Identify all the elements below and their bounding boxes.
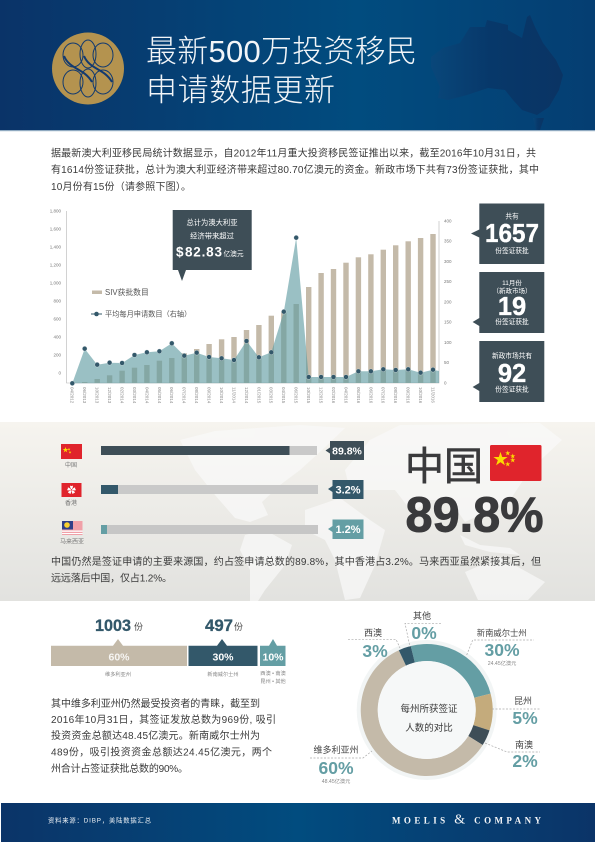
segment: NSW: 新南威尔士州 [207, 670, 239, 678]
callout: total funds: 亿澳元 [224, 249, 244, 258]
header banner [0, 0, 595, 131]
row: Malaysia: 1.2% [335, 524, 361, 536]
left axis: 1,400 [50, 244, 61, 250]
row: China [61, 441, 364, 469]
label: WA: 西澳 [364, 627, 382, 638]
x axis labels: 12/2014 [244, 387, 249, 404]
figure: Victoria count: 1003 [95, 616, 131, 635]
callout: total funds: 82.83 [185, 244, 222, 260]
legend: SIV获批数目 [105, 287, 149, 297]
bars [82, 234, 436, 383]
callout: total funds: $ [176, 244, 184, 260]
text: state commentary: 投资资金总额达48.45亿澳元。新南威尔士州为 [51, 729, 260, 742]
title: 最新500万投资移民 [146, 34, 417, 69]
label: others [405, 610, 441, 647]
logo [52, 32, 124, 104]
flag: China large: ★ [505, 451, 511, 457]
flag: China large: ★ [510, 454, 516, 460]
text: state commentary: 州合计占签证获批总数的90%。 [51, 762, 188, 775]
segment: Victoria: 维多利亚州 [105, 670, 131, 678]
text: country commentary: 远远落后中国，仅占1.2%。 [51, 572, 172, 584]
x axis labels: 10/2013 [95, 387, 100, 404]
text: country commentary [51, 555, 541, 584]
source note: 资料来源：DIBP，美陆数据汇总 [48, 816, 152, 824]
left axis: 800 [53, 298, 61, 304]
left axis: 600 [53, 316, 61, 322]
label: NSW [467, 628, 534, 667]
text: state commentary: 489份，吸引投资资金总额达24.45亿澳元，两个 [51, 746, 272, 758]
right axis: 150 [444, 320, 452, 325]
callout: total funds: 经济带来超过 [190, 232, 235, 240]
big figure: China: 89.8% [406, 488, 544, 542]
label: WA [348, 627, 400, 661]
label: South Australia [485, 739, 540, 771]
flag: China large: ★ [505, 462, 511, 468]
stat box: total [471, 204, 544, 264]
flag: China [61, 444, 82, 459]
legend: 平均每月申请数目（右轴） [105, 310, 191, 318]
x axis labels: 04/2014 [144, 387, 149, 404]
world map background [180, 423, 562, 601]
donut centre label: 人数的对比 [405, 722, 453, 734]
segment: Victoria [361, 650, 483, 776]
label: Queensland: 昆州 [514, 696, 532, 706]
right axis [444, 218, 452, 386]
x axis labels: 05/2016 [356, 387, 361, 404]
stat box: new policy market [473, 341, 544, 402]
x axis labels: 04/2015 [281, 387, 286, 404]
left axis: 0 [58, 370, 61, 376]
panel: source countries [0, 422, 595, 601]
segment: Western Australia [399, 646, 415, 666]
segment: NSW [188, 639, 258, 678]
flag: China large: ★ [493, 451, 508, 468]
stat box: November: 份签证获批 [495, 317, 529, 326]
x axis labels: 08/2014 [194, 387, 199, 404]
x axis labels: 03/2015 [269, 387, 274, 404]
row: Hong Kong: 香港 [65, 499, 77, 507]
figure: Victoria count: 份 [134, 621, 143, 632]
segment: Victoria: 60% [108, 652, 130, 664]
right axis: 400 [444, 218, 452, 224]
x axis labels: 09/2014 [206, 387, 212, 404]
x axis labels [70, 387, 435, 404]
segment: other states [260, 639, 287, 685]
data points [70, 235, 435, 386]
x axis labels: 11/2016 [430, 387, 435, 403]
title [146, 34, 417, 108]
left axis: 400 [53, 334, 61, 340]
left axis: 1,000 [50, 280, 61, 286]
label: NSW: 新南威尔士州 [477, 628, 527, 638]
segment: NSW: 30% [212, 652, 234, 664]
label: WA: 3% [362, 641, 388, 661]
combo chart: SIV approvals and monthly applications [50, 208, 452, 404]
x axis labels: 05/2014 [157, 387, 162, 404]
left axis: 1,800 [50, 208, 61, 214]
big figure: China: 中国 [405, 446, 483, 489]
big figure: China [405, 445, 544, 542]
footer [1, 803, 595, 842]
flag: China large: ★ [510, 458, 516, 464]
row: China: 中国 [65, 461, 77, 469]
label: South Australia: 2% [512, 751, 538, 771]
x axis labels: 03/2014 [132, 387, 137, 404]
intro text: 10月份有15份（请参照下图）。 [51, 180, 191, 193]
label: Queensland: 5% [512, 708, 538, 728]
label: others: 0% [411, 623, 437, 643]
label: Victoria [310, 744, 372, 785]
stat box: November: 19 [498, 293, 526, 321]
flag: Hong Kong: ✿ [67, 486, 76, 496]
callout: total funds: 总计为澳大利亚 [186, 218, 238, 227]
x axis labels: 01/2015 [256, 387, 261, 404]
label: Queensland [492, 696, 541, 728]
left axis [50, 208, 439, 383]
segment: Victoria [51, 639, 187, 678]
label: NSW: 30% [484, 640, 520, 660]
intro text: 有1614份签证获批，总计为澳大利亚经济带来超过80.70亿澳元的资金。新政市场下共有73份签证获批，其中 [51, 163, 539, 176]
figure: NSW count: 份 [234, 621, 243, 632]
label: NSW: 24.45亿澳元 [488, 659, 516, 667]
row: Malaysia: 马来西亚 [60, 538, 84, 546]
stat box: total: 份签证获批 [495, 246, 529, 255]
text: state commentary: 2016年10月31日，其签证发放总数为969份, 吸引 [51, 713, 276, 726]
x axis labels: 07/2016 [381, 387, 386, 404]
callout: total funds [173, 210, 252, 281]
label: Victoria: 60% [318, 758, 354, 778]
stat box: new policy market: 份签证获批 [495, 385, 529, 394]
x axis labels: 06/2013 [82, 387, 87, 404]
label: others: 其他 [413, 610, 431, 621]
text: state commentary [51, 697, 276, 775]
right axis: 350 [444, 239, 452, 244]
donut chart: visas by state [310, 610, 541, 785]
segment: other states: 西澳 • 南澳 [260, 669, 287, 677]
x axis labels: 10/2016 [418, 387, 423, 404]
figure: NSW count: 497 [205, 616, 233, 635]
intro text: 据最新澳大利亚移民局统计数据显示，自2012年11月重大投资移民签证推出以来，截至2016年10月31日，共 [51, 146, 536, 160]
text: country commentary: 中国仍然是签证申请的主要来源国，约占签申请总数的89.8%，其中香港占3.2%。马来西亚虽然紧接其后，但 [51, 555, 541, 568]
stat box: total: 共有 [505, 211, 519, 220]
map of Australia [431, 15, 563, 130]
segment: other states: 昆州 • 其他 [260, 677, 286, 685]
label: Victoria: 维多利亚州 [313, 744, 359, 755]
stat box: November: 11月份 [502, 278, 522, 287]
flag: Malaysia [62, 521, 82, 535]
title: 申请数据更新 [146, 73, 335, 108]
row: Malaysia [60, 520, 364, 546]
x axis labels: 06/2014 [169, 387, 174, 404]
x axis labels: 11/2014 [231, 387, 236, 403]
x axis labels: 12/2013 [107, 387, 112, 404]
flag: China large [490, 445, 542, 481]
panel: state share bar [51, 616, 287, 685]
flag: China: ★ [68, 447, 71, 451]
segment: Queensland [473, 694, 493, 730]
row: Hong Kong: 3.2% [335, 484, 361, 496]
stat box: November: （新政市场） [492, 286, 532, 295]
flag: China: ★ [62, 447, 69, 454]
flag: Hong Kong [62, 483, 82, 497]
x axis labels: 06/2016 [368, 387, 373, 404]
right axis: 300 [444, 259, 452, 264]
segment: others/NSW teal [411, 644, 491, 698]
x axis labels: 09/2016 [406, 387, 411, 404]
flag: China: ★ [68, 450, 72, 454]
stat box: November [473, 272, 544, 333]
x axis labels: 10/2014 [219, 387, 224, 404]
company wordmark: MOELIS & COMPANY [392, 812, 542, 828]
label: Victoria: 48.45亿澳元 [322, 777, 350, 785]
donut centre label: 每州所获签证 [400, 703, 458, 715]
stat box: total: 1657 [485, 220, 539, 248]
x axis labels: 02/2016 [331, 387, 336, 404]
area of monthly applications [72, 238, 439, 383]
segment: other states: 10% [262, 652, 284, 664]
right axis: 0 [444, 380, 447, 386]
legend [91, 287, 191, 318]
left axis: 1,200 [50, 262, 61, 268]
right axis: 100 [444, 340, 452, 345]
left axis: 200 [53, 352, 61, 358]
right axis: 200 [444, 300, 452, 304]
x axis labels: 08/2016 [393, 387, 398, 404]
stat box: new policy market: 新政市场共有 [492, 351, 532, 360]
x axis labels: 04/2016 [343, 387, 348, 404]
x axis labels: 06/2015 [294, 387, 299, 404]
text: state commentary: 其中维多利亚州仍然最受投资者的青睐，截至到 [51, 697, 260, 710]
x axis labels: 10/2015 [306, 387, 311, 404]
x axis labels: 12/2015 [318, 387, 324, 404]
segment: South Australia [468, 725, 490, 745]
right axis: 50 [444, 360, 450, 365]
stat box: new policy market: 92 [498, 360, 526, 388]
row: Hong Kong [62, 480, 364, 507]
x axis labels: 07/2014 [182, 387, 187, 404]
left axis: 1,600 [50, 226, 61, 232]
label: South Australia: 南澳 [515, 739, 533, 750]
intro text [51, 146, 539, 193]
right axis: 250 [444, 279, 452, 284]
donut centre label [400, 703, 458, 734]
row: China: 89.8% [332, 446, 363, 458]
x axis labels: 02/2014 [120, 387, 124, 404]
x axis labels: 04/2012 [70, 387, 75, 404]
